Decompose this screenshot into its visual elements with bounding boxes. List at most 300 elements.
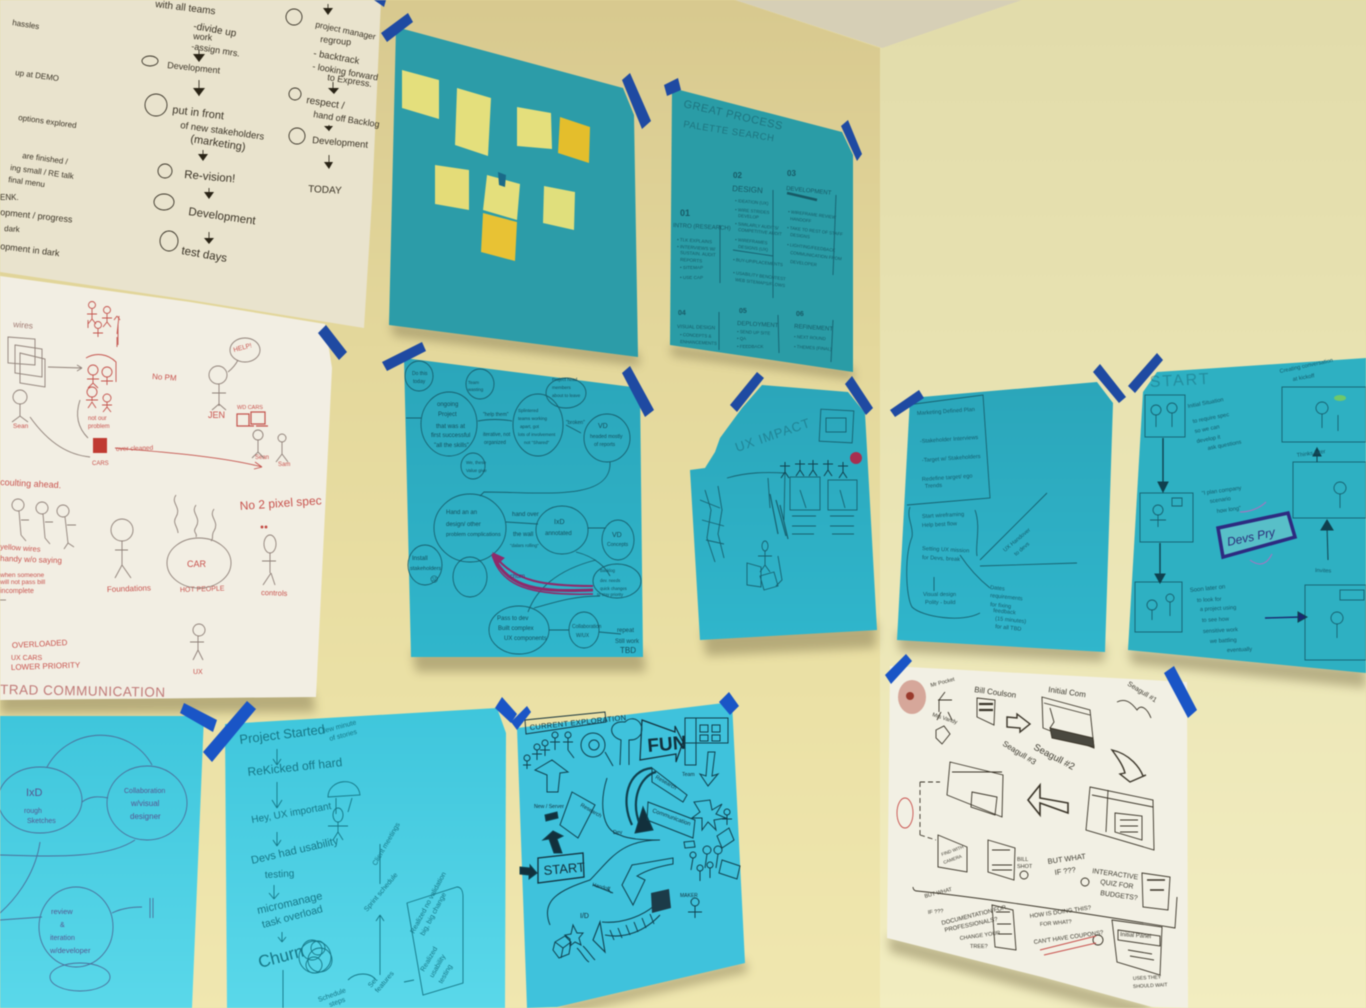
- red labels: when someone: [0, 572, 44, 579]
- journey notes: Soon later on: [1190, 584, 1226, 594]
- paper shadows: [0, 322, 1366, 1008]
- step list: left column: final menu: [8, 175, 46, 189]
- step 04: • CONCEPTS &: [680, 332, 712, 339]
- red labels: wires: [12, 319, 33, 331]
- red labels: problem: [88, 424, 110, 430]
- bubble text: Hand an an: [446, 510, 477, 516]
- journey notes: ask questions: [1207, 440, 1242, 452]
- journey notes: sensitive work: [1203, 627, 1238, 635]
- sketch labels: FOR WHAT?: [1040, 919, 1072, 928]
- bubble text: VD: [598, 423, 608, 430]
- journey notes: "I plan company: [1201, 485, 1242, 497]
- red labels: JEN: [208, 410, 225, 420]
- step 06: 06: [796, 311, 804, 318]
- sketch labels: QUIZ FOR: [1100, 879, 1134, 891]
- journey notes: [1187, 358, 1334, 654]
- sketch labels: CAMERA: [943, 854, 962, 865]
- red labels: [0, 319, 322, 700]
- step list: centre column: put in front: [172, 104, 225, 122]
- bubble text: Collaboration: [572, 624, 602, 630]
- poster text: -Target w/ Stakeholders: [922, 454, 981, 464]
- fun sign: [640, 720, 687, 762]
- narrative steps: Client meetings: [372, 821, 402, 867]
- step list: right column: respect /: [306, 95, 345, 112]
- bubble text: not "Shared": [524, 440, 550, 445]
- pencil stick figures and frames: [0, 337, 288, 660]
- red labels: No 2 pixel spec: [239, 493, 322, 513]
- narrative steps: features: [374, 970, 396, 994]
- red labels: OVERLOADED: [12, 638, 68, 650]
- sketch labels: BUDGETS?: [1100, 890, 1138, 902]
- coral underline: [1040, 936, 1096, 955]
- step 02: 02: [733, 171, 742, 180]
- step list: centre column: (marketing): [190, 133, 246, 154]
- step list: left column: opment / progress: [0, 207, 73, 225]
- poster text: feedback: [993, 608, 1016, 616]
- bubble text: problem complications: [446, 532, 501, 538]
- step list: left column: hassles: [12, 18, 40, 31]
- red labels: Sam: [278, 462, 290, 468]
- poster text: Setting UX mission: [922, 546, 969, 554]
- bubble text: IxD: [26, 787, 43, 799]
- poster text: Dates: [990, 585, 1005, 593]
- step list: centre column: [154, 0, 265, 265]
- wall: right: [880, 0, 1366, 1008]
- narrative steps: testing: [438, 964, 454, 985]
- bubble text: Project head: [552, 377, 578, 382]
- red labels: incomplete: [0, 588, 34, 595]
- step 05: • SEND UP SITE: [737, 329, 770, 336]
- step 03: • TAKE TO REST OF STAFF: [787, 225, 843, 237]
- red labels: Sean: [255, 455, 269, 461]
- bubble text: "broken": [566, 420, 585, 426]
- step 02: • BUY-UP/PLACEMENTS: [733, 257, 783, 267]
- bubble text: TBD: [620, 646, 636, 655]
- start sign: START: [543, 859, 586, 878]
- journey notes: we battling: [1209, 638, 1237, 645]
- bubble text: members: [552, 385, 572, 390]
- journey notes: at kickoff: [1292, 373, 1315, 383]
- panel: torn-corner poster: [690, 385, 877, 640]
- journey notes: to see how: [1202, 617, 1230, 624]
- poster text: for Devs, break: [922, 555, 960, 563]
- step 02: DESIGN: [732, 184, 763, 195]
- sketch labels: Seagull #2: [1032, 742, 1076, 773]
- bubble text: iterative, not: [483, 432, 511, 438]
- step 02: DEVELOP: [738, 213, 759, 220]
- sketch labels: CHANGE YOUR: [959, 930, 1001, 942]
- narrative steps: ReKicked off hard: [247, 755, 343, 779]
- step list: left column: up at DEMO: [15, 68, 60, 83]
- narrative steps: Hey, UX important: [251, 801, 332, 826]
- bubble text: "help them": [483, 412, 509, 418]
- big arrows and people sketches: [520, 718, 740, 962]
- poster text: -Stakeholder Interviews: [920, 435, 979, 445]
- devs banner: Devs Pry: [1226, 525, 1277, 549]
- sticky notes: [402, 70, 590, 261]
- red labels: Sean: [13, 423, 29, 430]
- poster text: Trends: [925, 483, 943, 490]
- journey notes: a project using: [1200, 605, 1236, 613]
- devs banner: [1218, 502, 1295, 564]
- poster text: to devs: [1013, 541, 1031, 558]
- bubble text: IxD: [554, 519, 564, 526]
- sketch labels: Initial Com: [1048, 685, 1087, 699]
- bubble text: repeat: [617, 628, 634, 634]
- poster text: Help best flow: [922, 521, 958, 529]
- bubble text: Concepts: [607, 542, 629, 548]
- sketch notes: New / Server: [534, 804, 564, 810]
- step list: centre column: -assign mrs.: [191, 41, 241, 59]
- step list: centre column: work: [192, 31, 213, 43]
- step 01: • TLK EXPLAINS: [677, 237, 712, 244]
- bubble text: Install: [412, 556, 428, 562]
- bubble text: Collaboration: [124, 788, 165, 795]
- poster text: Visual design: [923, 592, 956, 598]
- step 05: [737, 308, 779, 349]
- journey notes: eventually: [1227, 647, 1252, 654]
- bubble text: "dalars rolling": [510, 543, 539, 548]
- sketch labels: DOCUMENTATION FOR: [941, 905, 1008, 927]
- bubble text: organized: [484, 440, 506, 446]
- bubble text: w/visual: [130, 799, 160, 808]
- bubble text: [410, 371, 640, 655]
- column dividers: [719, 190, 836, 362]
- bubble text: to stay priority: [597, 592, 624, 597]
- step 01: INTRO (RESEARCH): [673, 223, 731, 232]
- narrative steps: Realized no validation: [410, 871, 448, 935]
- sketch labels: TREE?: [970, 944, 988, 950]
- bubble text: design/ other: [446, 522, 481, 528]
- step 03: • WIREFRAME REVIEW: [788, 209, 837, 220]
- bubble text: churn: [510, 574, 525, 580]
- poster text: (15 minutes): [995, 616, 1026, 625]
- sketch notes: [534, 772, 698, 920]
- red labels: coulting ahead.: [0, 477, 61, 490]
- step list: right column: hand off Backlog: [313, 109, 380, 129]
- poster text: Start wireframing: [922, 512, 964, 520]
- panel: top-left white process chart: [0, 0, 381, 328]
- red labels: CARS: [92, 461, 109, 467]
- poster text: for all TBD: [995, 624, 1022, 633]
- narrative steps: big, big change: [420, 892, 448, 937]
- journey notes: Creating conversation: [1279, 358, 1334, 375]
- step 02: • WIREFRAMES: [735, 237, 768, 245]
- step 06: [794, 311, 834, 352]
- step list: left column: ENK.: [0, 193, 19, 202]
- dark team figures: [780, 460, 848, 478]
- step list: right column: TODAY: [308, 184, 342, 197]
- step 04: VISUAL DESIGN: [677, 324, 716, 331]
- step 01: • SITEMAP: [680, 265, 703, 270]
- bubble text: Team: [468, 380, 479, 385]
- sketch labels: SHOULD WAIT: [1133, 982, 1168, 990]
- poster title: PALETTE SEARCH: [683, 119, 775, 144]
- journey notes: to require spec: [1192, 412, 1230, 425]
- ceiling: [735, 0, 1022, 48]
- journey notes: Thinks later: [1296, 449, 1326, 459]
- sketch labels: USES THEY: [1133, 974, 1162, 982]
- bubble text: Splintered: [518, 408, 539, 413]
- bubble text: about to leave: [552, 393, 581, 398]
- bubble text: rough: [24, 808, 42, 815]
- bubble text: W/UX: [576, 633, 590, 639]
- narrative steps: usability: [429, 953, 448, 979]
- bubble text: Project: [438, 412, 457, 418]
- sketch labels: BUT WHAT: [924, 887, 953, 900]
- poster title: GREAT PROCESS: [682, 98, 784, 133]
- step 04: [677, 310, 717, 346]
- sketch labels: IF ???: [1054, 865, 1076, 877]
- step list: right column: regroup: [320, 34, 352, 47]
- violet bubbles: [0, 735, 187, 991]
- step 01: REPORTS: [680, 257, 702, 264]
- bubble text: stakeholders: [410, 566, 441, 572]
- panel: sticky notes poster: [389, 27, 638, 357]
- step list: right column: [306, 19, 380, 197]
- red labels: CAR: [187, 559, 207, 569]
- poster text: Polity - build: [925, 600, 955, 606]
- panel: current experience poster: [517, 702, 745, 1008]
- bubble text: VD: [612, 532, 622, 539]
- journey notes: to look for: [1197, 597, 1222, 604]
- narrative steps: Sprint schedule: [363, 872, 400, 913]
- sketch notes: Research: [654, 775, 677, 792]
- journey notes: scenario: [1209, 496, 1231, 505]
- bubble text: Still work: [615, 639, 640, 645]
- cars box: [93, 438, 107, 453]
- step 03: 03: [787, 169, 796, 178]
- step list: left column: dark: [4, 224, 21, 234]
- bubble text: designer: [130, 812, 161, 821]
- bubble text: that was at: [436, 424, 465, 430]
- bubble text: review: [51, 907, 73, 916]
- bubble text: apart, got: [520, 424, 540, 429]
- step 03: DEVELOPMENT: [786, 186, 832, 197]
- red labels: handy w/o saying: [0, 554, 62, 565]
- step 02: • SIMILARLY AUDITS/: [735, 221, 780, 231]
- sketch labels: BUT WHAT: [1047, 852, 1087, 866]
- step 05: • FEEDBACK: [737, 344, 763, 349]
- step 04: ENHANCEMENTS: [680, 339, 717, 346]
- bubbles and connectors: [405, 361, 641, 654]
- step list: centre column: -divide up: [192, 21, 238, 40]
- bubble text: hand over: [512, 512, 539, 518]
- sketch labels: BILL: [1017, 857, 1028, 863]
- step list: right column: to Express.: [327, 72, 373, 89]
- narrative steps: [239, 719, 454, 1008]
- step list: right column: Development: [312, 135, 369, 151]
- sketch notes: Communication: [651, 808, 691, 828]
- red labels: LOWER PRIORITY: [11, 661, 81, 672]
- bubble text: [24, 787, 165, 955]
- bubble text: lots of involvement: [518, 432, 556, 437]
- step 03: DEVELOPER: [790, 259, 817, 267]
- bubble text: Sketches: [27, 818, 56, 825]
- bubble text: Built complex: [498, 626, 534, 632]
- step 04: 04: [678, 310, 686, 317]
- poster text: UX Handover: [1002, 527, 1032, 554]
- step list: left column: ing small / RE talk: [10, 163, 75, 181]
- red labels: will not pass bill: [0, 579, 46, 586]
- step list: left column: [0, 18, 77, 258]
- step 02: • USABILITY BENCHTEST: [733, 270, 786, 281]
- narrative steps: Devs had usability: [250, 835, 340, 867]
- poster heading: CURRENT EXPLORATION: [529, 713, 627, 732]
- step 01: • INTERVIEWS W/: [677, 244, 716, 252]
- bubble text: today: [413, 379, 426, 385]
- red labels: UX CARS: [11, 655, 42, 662]
- step 05: DEPLOYMENT: [737, 321, 779, 329]
- step list: left column: opment in dark: [0, 241, 61, 258]
- bubble text: w/developer: [49, 946, 91, 955]
- red dot: [850, 452, 862, 464]
- red labels: Foundations: [107, 583, 151, 594]
- red labels: not our: [88, 416, 107, 422]
- step list: centre column: of new stakeholders: [180, 120, 265, 143]
- sketch notes: Research: [579, 803, 602, 820]
- step 03: • LIGHTING/FEEDBACK: [787, 242, 836, 253]
- step 05: • QA: [737, 336, 746, 341]
- panel: project started poster: [225, 708, 506, 1008]
- step list: centre column: Re-vision!: [184, 169, 236, 185]
- red labels: WD CARS: [237, 405, 263, 411]
- step list: centre column: Development: [188, 206, 257, 228]
- narrative steps: task overload: [261, 903, 324, 931]
- panel: marketing poster: [897, 382, 1113, 652]
- step 06: REFINEMENT: [794, 324, 834, 333]
- narrative steps: Set: [367, 977, 379, 989]
- step list: centre column: Development: [167, 60, 221, 76]
- step 01: 01: [680, 208, 690, 218]
- red labels: over cleaned: [116, 445, 154, 453]
- sketch notes: Handoff: [591, 882, 611, 893]
- tape: blue strips: [318, 0, 1163, 417]
- narrative steps: Realized: [420, 946, 439, 973]
- step 02: • IDEATION (UX): [735, 198, 769, 206]
- target logo: [898, 680, 926, 714]
- journey notes: Initial Situation: [1187, 397, 1224, 410]
- poster text: [917, 407, 1032, 633]
- sketch notes: I/D: [580, 913, 589, 920]
- sketch notes: Team: [682, 772, 695, 778]
- panel: red sketch poster: [0, 276, 332, 700]
- sketch notes: MAKER: [680, 893, 698, 899]
- poster text: Redefine target/ ego: [922, 473, 973, 483]
- narrative steps: Schedule: [317, 987, 347, 1004]
- red labels: TRAD COMMUNICATION: [0, 682, 166, 700]
- bubble text: &: [60, 922, 65, 929]
- bubble text: annotated: [545, 531, 572, 537]
- red labels: HOT PEOPLE: [180, 585, 225, 594]
- step list: centre column: test days: [180, 245, 228, 265]
- bubble text: Backlog: [600, 568, 616, 573]
- journey notes: how long": [1216, 506, 1241, 515]
- step 06: • NEXT ROUND: [794, 334, 826, 341]
- panel: great process palette search poster: [670, 88, 853, 372]
- bubble text: iteration: [50, 935, 75, 942]
- bubble text: ☹: [430, 575, 438, 584]
- poster text: requirements: [990, 593, 1023, 602]
- sketch labels: FIND WITH: [941, 844, 964, 857]
- step list: right column: - looking forward: [312, 61, 379, 83]
- narrative steps: Churn: [256, 942, 306, 972]
- journey notes: develop it: [1196, 434, 1221, 445]
- narrative steps: Project Started: [239, 722, 326, 747]
- poster heading: START: [1149, 371, 1211, 391]
- panel: white wireframe poster: [887, 666, 1188, 1008]
- poster lines: [907, 395, 1077, 618]
- sketch labels: PROFESSIONALS?: [944, 917, 999, 934]
- bubble text: headed mostly: [590, 434, 623, 440]
- red labels: No PM: [152, 372, 177, 383]
- step 03: COMMUNICATION FROM: [790, 250, 842, 261]
- sketch labels: HOW IS DOING THIS?: [1029, 905, 1092, 920]
- panel: start journey poster: [1128, 358, 1366, 673]
- wall: left: [0, 0, 880, 1008]
- journey frames with arrows: [1135, 387, 1366, 660]
- panel: project flow poster with bubbles: [404, 358, 643, 657]
- bubble text: first successful: [431, 433, 470, 439]
- bubble text: Do this: [412, 371, 428, 377]
- poster text: for fixing: [990, 602, 1011, 610]
- step 03: [786, 169, 843, 267]
- step 02: DESIGNS (UX): [738, 244, 769, 252]
- bubble text: dev. needs: [600, 578, 620, 583]
- step list: right column: - backtrack: [312, 48, 360, 67]
- sketch labels: CAN'T HAVE COUPONS?: [1033, 930, 1105, 946]
- sketch labels: Seagull #1: [1126, 681, 1158, 704]
- sketch labels: Seagull #3: [1001, 739, 1038, 767]
- step list: left column: are finished /: [22, 151, 69, 166]
- sketch labels: INTERACTIVE: [1092, 868, 1139, 881]
- step 02: WEB SITEMAPS/FLOWS: [735, 277, 785, 288]
- narrative steps: testing: [265, 868, 295, 881]
- sketch figures and screens: [700, 409, 857, 590]
- step 02: COMPETITIVE AUDIT: [738, 227, 782, 237]
- step 02: [732, 171, 786, 288]
- churn arrow: [492, 553, 593, 594]
- journey notes: so we can: [1194, 424, 1220, 435]
- step 05: 05: [739, 308, 747, 315]
- wireframe screens and arrows: [897, 692, 1177, 975]
- journey notes: Invites: [1315, 568, 1331, 575]
- step 03: DESIGNS: [790, 232, 810, 239]
- bubble text: wasting: [468, 387, 484, 392]
- bubble text: "all the skills": [434, 443, 469, 449]
- bubble text: ongoing: [437, 402, 458, 408]
- fun sign: FUN: [647, 733, 687, 757]
- step 03: HANDOFF: [790, 216, 812, 224]
- step 01: • USE CAP: [680, 275, 703, 280]
- sketch labels: Bill Coulson: [974, 685, 1017, 700]
- red figures and arrows: [86, 302, 268, 528]
- sketch labels: SHOT: [1017, 864, 1033, 870]
- narrative steps: of stories: [329, 729, 358, 743]
- flow arrows and cloud: [269, 749, 463, 1008]
- start sign: [538, 853, 586, 883]
- sketch labels: IF ???: [928, 909, 944, 916]
- sketch labels: Mrs Vandy: [931, 712, 958, 726]
- poster text: Marketing Defined Plan: [917, 407, 975, 417]
- step list: right column: project manager: [315, 19, 377, 42]
- sketch notes: Dev: [613, 830, 623, 836]
- bubble text: We, these: [466, 460, 487, 465]
- flow arrows: [1155, 438, 1333, 622]
- bubble text: Pass to dev: [497, 616, 528, 622]
- dark stack: [651, 889, 671, 913]
- step number circles and arrows: [142, 4, 333, 251]
